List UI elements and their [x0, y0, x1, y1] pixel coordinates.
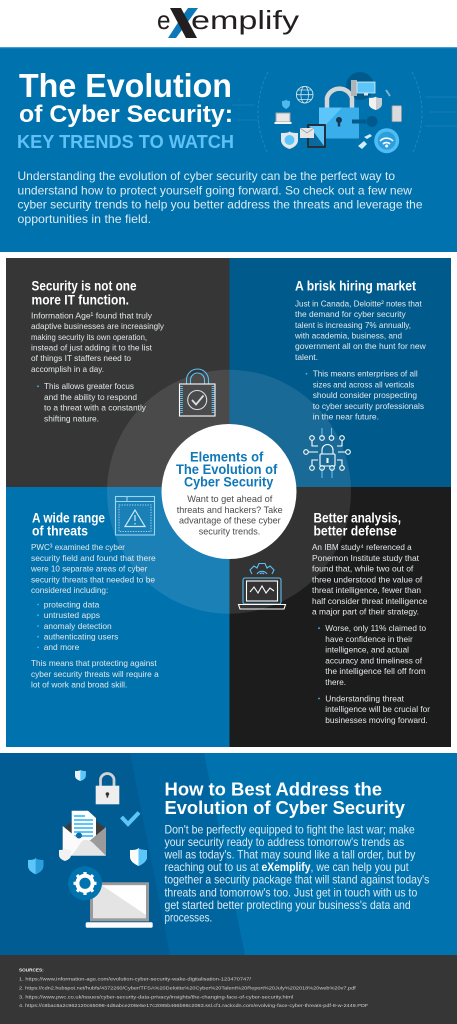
- title: of Cyber Security:: [19, 101, 233, 128]
- body text: PWC³ examined the cyber: [31, 542, 125, 552]
- bullet: understanding: [318, 693, 430, 725]
- bullet list: authenticating users: [44, 632, 119, 642]
- logo: eXemplify: [157, 5, 299, 38]
- intro text: opportunities in the field.: [18, 213, 151, 226]
- body text: considered including:: [31, 585, 108, 595]
- panel: how to best address: [0, 753, 457, 955]
- bullet: to a threat with a constantly: [44, 402, 147, 412]
- body text: [31, 310, 165, 374]
- body text: processes.: [164, 911, 212, 924]
- body text: found that, while two out of: [312, 564, 414, 574]
- body text: get started better protecting your business's data and: [164, 899, 411, 912]
- source links: 3. https://www.pwc.co.uk/issues/cyber-security-data-privacy/insights/the-changing-face-of-cyber-security.html: [19, 994, 293, 999]
- body text: government all on the hunt for new: [295, 341, 426, 351]
- body text: making security its own operation,: [31, 332, 147, 342]
- icon: cyber security lock cluster: [232, 72, 457, 154]
- bullet: worse: have confidence in their: [325, 634, 413, 644]
- bullet list: anomaly detection: [44, 621, 112, 631]
- icon: warning browser window: [116, 496, 154, 535]
- body text: [294, 298, 426, 362]
- bullet: [37, 381, 147, 423]
- heading: A brisk hiring market: [295, 279, 416, 295]
- heading: [164, 779, 406, 818]
- body text: threats and tomorrow's too. Just get in touch with us to: [164, 886, 417, 899]
- heading: Security is not one: [32, 279, 137, 295]
- centre text: Want to get ahead of: [187, 493, 273, 504]
- intro text: cyber security trends to help you better address the threats and leverage the: [18, 199, 423, 212]
- body text: [312, 542, 427, 616]
- bullet: understanding: Understanding threat: [325, 693, 405, 703]
- closing text: cyber security threats will require a: [31, 669, 159, 679]
- body text: talent.: [295, 352, 318, 362]
- bullet: to cyber security professionals: [313, 401, 425, 411]
- heading: of threats: [32, 524, 88, 540]
- logo: eXemplify: e: [157, 5, 170, 35]
- body text: half consider threat intelligence: [312, 596, 427, 606]
- bullet: worse: accuracy and timeliness of: [325, 655, 423, 665]
- heading: [314, 510, 401, 540]
- body text: three understood the value of: [312, 574, 423, 584]
- body text: security field and found that there: [31, 553, 156, 563]
- centre text: threats and hackers? Take: [177, 504, 283, 515]
- body text: threat intelligence, fewer than: [312, 585, 421, 595]
- bullet list: [37, 599, 119, 652]
- bullet list: untrusted apps: [44, 610, 101, 620]
- icon: circuit padlock: [304, 428, 350, 478]
- source links: [19, 976, 369, 1008]
- body text: reaching out to us at eXemplify, we can help you put: [164, 861, 409, 874]
- body text: Ponemon Institute study that: [312, 553, 420, 563]
- bullet: worse: the intelligence fell off from: [325, 666, 426, 676]
- title: [17, 67, 234, 152]
- heading: A wide range: [32, 510, 105, 526]
- body text: security threats that needed to be: [31, 574, 155, 584]
- bullet: shifting nature.: [44, 413, 99, 423]
- body text: a major part of their strategy.: [312, 606, 419, 616]
- body text: the demand for cyber security: [295, 309, 406, 319]
- bullet list: and more: [44, 642, 79, 652]
- body text: adaptive businesses are increasingly: [31, 321, 165, 331]
- closing text: lot of work and broad skill.: [31, 680, 127, 690]
- translucent centre ring: [107, 370, 351, 614]
- panel: a brisk hiring market: [230, 258, 451, 487]
- body text: instead of just adding it to the list: [31, 342, 153, 352]
- body text: accomplish in a day.: [31, 364, 104, 374]
- body text: your security ready to address tomorrow's trends as: [164, 836, 404, 849]
- bullet: worse: [318, 623, 426, 687]
- centre heading: Cyber Security: [184, 474, 273, 490]
- body text: Information Age¹ found that truly: [31, 310, 153, 320]
- bullet: sizes and across all verticals: [313, 379, 415, 389]
- bullet: worse: there.: [325, 677, 346, 687]
- body text: Don't be perfectly equipped to fight the last war; make: [164, 823, 415, 836]
- heading: better defense: [314, 524, 397, 540]
- source links: 2. https://cdn2.hubspot.net/hubfs/4372260/Cyber/TFSA%20Deloitte%20Cyber%20Talent%20Report%20July%202018%20web%20v7.pdf: [19, 985, 357, 990]
- panel: hero header: [0, 47, 457, 252]
- heading: Better analysis,: [314, 510, 401, 526]
- closing text: This means that protecting against: [31, 658, 157, 668]
- icon: gear and laptop monitor: [238, 564, 286, 609]
- heading: Evolution of Cyber Security: [164, 797, 406, 818]
- body text: An IBM study⁴ referenced a: [312, 542, 412, 552]
- panel: sources: [0, 955, 457, 1024]
- bullet: worse: Worse, only 11% claimed to: [325, 623, 426, 633]
- panel: better analysis, better defense: [230, 487, 451, 747]
- bullet: and the ability to respond: [44, 392, 137, 402]
- bullet: This allows greater focus: [44, 381, 135, 391]
- body text: Just in Canada, Deloitte² notes that: [295, 298, 422, 308]
- centre heading: [176, 450, 278, 490]
- title: The Evolution: [19, 67, 232, 104]
- bullet: should consider prospecting: [313, 390, 417, 400]
- bullet: This means enterprises of all: [313, 369, 418, 379]
- body text: talent is increasing 7% annually,: [295, 320, 411, 330]
- bullet: in the near future.: [313, 412, 379, 422]
- sources heading: SOURCES:: [19, 968, 44, 973]
- centre text: advantage of these cyber: [179, 515, 281, 526]
- centre text: [177, 493, 283, 536]
- panel: a wide range of threats: [6, 487, 230, 747]
- heading: [32, 279, 137, 308]
- source links: 4. https://c8bac8a2c962120c65098-4d6abce208e5e17c2085b466b98c2083.ssl.cf1.rackcdn.com/evolving-face-cyber-threats-pdf-8-w-2449.PDF: [19, 1003, 369, 1008]
- centre heading: The Evolution of: [176, 462, 278, 478]
- heading: How to Best Address the: [164, 779, 382, 800]
- heading: more IT function.: [32, 292, 129, 308]
- body text: [30, 542, 156, 595]
- body text: [164, 823, 429, 924]
- heading: [32, 510, 105, 540]
- body text: together a security package that will stand against today's: [164, 874, 429, 887]
- closing text: [31, 658, 159, 690]
- centre circle: elements of the evolution of cyber security: [162, 424, 296, 559]
- body text: with academia, business, and: [294, 330, 402, 340]
- logo: eXemplify: emplify: [191, 5, 299, 35]
- body text: were 10 separate areas of cyber: [30, 564, 147, 574]
- bullet: understanding: intelligence will be crucial for: [325, 704, 430, 714]
- bullet: worse: intelligence, and actual: [325, 645, 409, 655]
- source links: 1. https://www.information-age.com/evolution-cyber-security-wake-digitalisation-123470747/: [19, 976, 252, 981]
- intro text: Understanding the evolution of cyber security can be the perfect way to: [18, 170, 395, 183]
- panel: security is not one more IT function: [6, 258, 230, 487]
- intro text: understand how to protect yourself going forward. So check out a few new: [18, 184, 413, 197]
- bullet: understanding: businesses moving forward.: [325, 715, 428, 725]
- centre text: security trends.: [199, 526, 260, 536]
- body text: well as today's. That may sound like a tall order, but by: [164, 848, 415, 862]
- icon: padlock with checkmark: [180, 369, 215, 416]
- centre heading: Elements of: [190, 450, 264, 466]
- bullet: [306, 369, 425, 422]
- intro text: [18, 170, 423, 226]
- bullet list: protecting data: [44, 599, 99, 609]
- title: KEY TRENDS TO WATCH: [17, 131, 234, 152]
- body text: of things IT staffers need to: [31, 353, 131, 363]
- illustration: email, lock, shields and laptop: [28, 770, 153, 928]
